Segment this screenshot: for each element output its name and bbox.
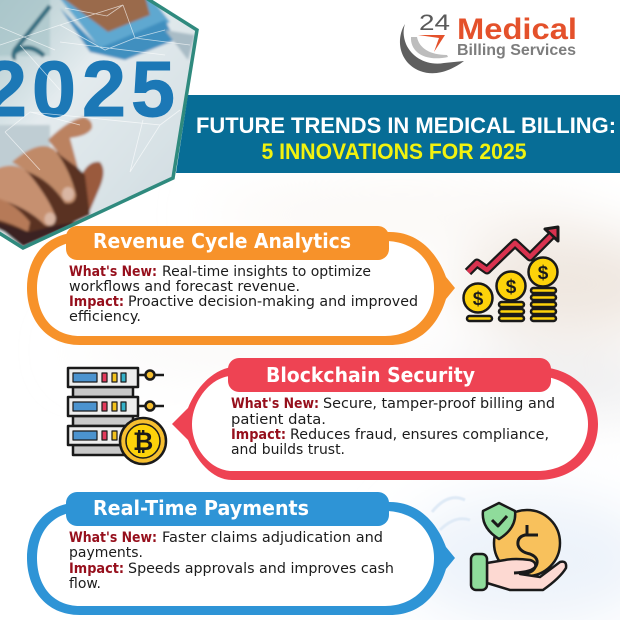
logo [400, 10, 577, 73]
body text: flow. [69, 576, 101, 592]
body text: Reduces fraud, ensures compliance, [290, 427, 549, 443]
body text: efficiency. [69, 309, 141, 325]
heading tab [228, 358, 551, 392]
logo: Medical [457, 13, 577, 46]
heading tab [66, 492, 389, 526]
body text: What's New: [69, 530, 157, 546]
body text: payments. [69, 545, 143, 561]
icon: coins and rising arrow: $ [538, 263, 549, 284]
panel: revenue cycle analytics: Revenue Cycle Analytics [93, 229, 351, 253]
icon: blockchain server and bitcoin: ₿ [133, 428, 153, 456]
hand [81, 160, 105, 212]
logo: 24 [419, 10, 450, 35]
body text: Proactive decision-making and improved [128, 294, 418, 310]
panel: blockchain security [172, 358, 598, 480]
body text: What's New: [231, 396, 319, 412]
body text: What's New: [69, 264, 157, 280]
panel: revenue cycle analytics [27, 226, 455, 345]
body text [231, 396, 555, 458]
body text [69, 264, 418, 325]
icon: blockchain server and bitcoin [68, 368, 166, 464]
body text: Real-time insights to optimize [162, 264, 371, 280]
title text: 5 INNOVATIONS FOR 2025 [262, 139, 526, 164]
body text [69, 530, 394, 592]
body text: patient data. [231, 412, 326, 428]
body text: Impact: [69, 294, 124, 310]
title banner [176, 95, 620, 173]
icon: coins and rising arrow [464, 227, 558, 321]
icon: coins and rising arrow: $ [473, 289, 484, 310]
photo hexagon: doctor with 2025 [0, 0, 210, 256]
body text: Speeds approvals and improves cash [128, 561, 394, 577]
body text: Secure, tamper-proof billing and [323, 396, 555, 412]
logo: Billing Services [457, 42, 576, 59]
network lines [0, 5, 190, 172]
panel: real-time payments [27, 492, 455, 615]
body text: and builds trust. [231, 442, 345, 458]
body text: Impact: [231, 427, 286, 443]
body text: workflows and forecast revenue. [69, 279, 300, 295]
heading tab [66, 226, 389, 260]
body text: Impact: [69, 561, 124, 577]
title text: FUTURE TRENDS IN MEDICAL BILLING: [196, 113, 616, 138]
title text [196, 113, 616, 164]
icon: hand with coin and shield [471, 503, 566, 590]
body text: Faster claims adjudication and [162, 530, 383, 546]
panel: real-time payments: Real-Time Payments [93, 496, 309, 520]
icon: coins and rising arrow: $ [506, 277, 517, 298]
panel: blockchain security: Blockchain Security [266, 363, 475, 387]
